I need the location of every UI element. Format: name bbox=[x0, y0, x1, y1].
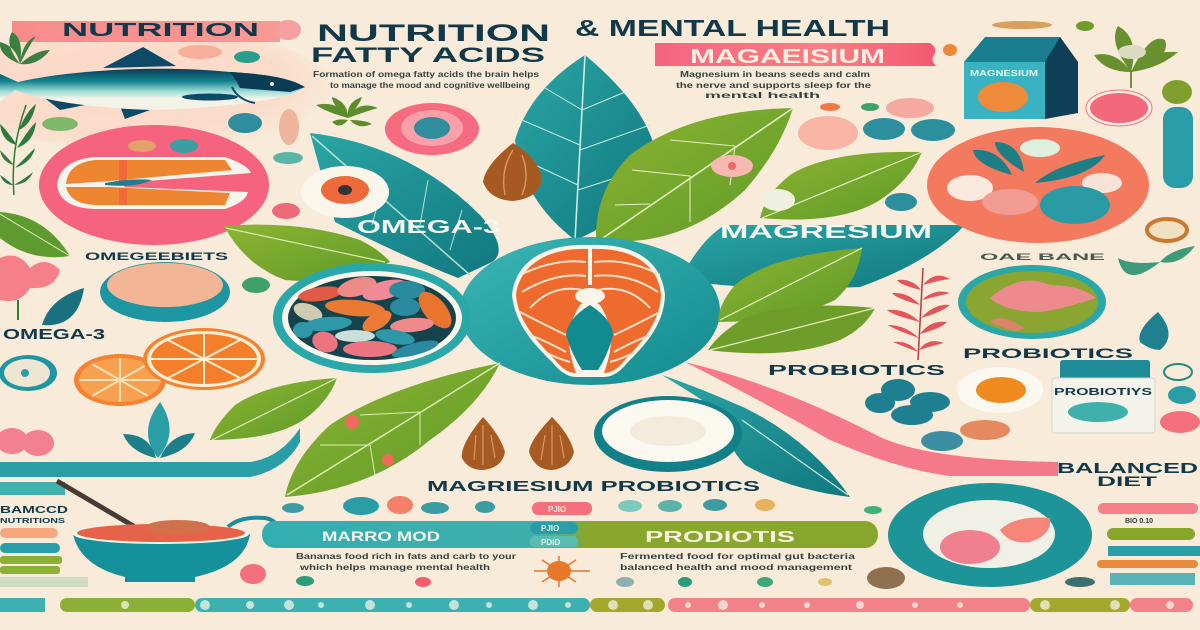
magnesium text block: Magnesium in beans seeds and calm bbox=[680, 70, 870, 79]
title: NUTRITION bbox=[317, 20, 550, 47]
sun icon bbox=[534, 556, 590, 587]
bottom-left labels: BAMCCD bbox=[0, 505, 68, 516]
small bowl left bbox=[0, 355, 57, 391]
flower pink left bbox=[0, 256, 60, 320]
teal centre ellipse bbox=[460, 237, 720, 385]
capsule right bbox=[1163, 107, 1193, 188]
bottom-left labels: NUTRITIONS bbox=[0, 518, 65, 525]
right sprig bbox=[1118, 246, 1195, 275]
bowl of mixed nuts bbox=[273, 263, 471, 373]
milk carton: MAGNESIUM bbox=[970, 69, 1038, 78]
right bottom labels bbox=[1065, 503, 1200, 587]
green leaf lower large bbox=[285, 363, 500, 497]
bottom text left: Bananas food rich in fats and carb to your bbox=[296, 552, 516, 561]
green leaf right upper bbox=[718, 248, 862, 322]
teal balls bbox=[865, 379, 963, 451]
pink pill above banner bbox=[532, 502, 592, 515]
probiotics label far right: PROBIOTICS bbox=[963, 345, 1133, 361]
pink disc top bbox=[385, 103, 479, 155]
scattered dots row below text bbox=[296, 576, 832, 587]
pink flower lower left bbox=[0, 428, 54, 456]
teal leaf top bbox=[515, 55, 655, 240]
left column label: omega-3: OMEGA-3 bbox=[3, 326, 105, 343]
small teal pebble bbox=[885, 193, 917, 211]
teal leaf small left bbox=[42, 288, 84, 325]
top left banner: nutrition: NUTRITION bbox=[62, 20, 259, 40]
balanced diet label: BALANCED bbox=[1057, 460, 1198, 477]
teal leaf left bbox=[310, 133, 499, 278]
right dots bbox=[1160, 364, 1200, 433]
green leaf mid-lower left bbox=[210, 378, 337, 440]
bottom centre banner: PDID bbox=[541, 538, 560, 547]
grapefruit bbox=[1086, 90, 1152, 126]
pink ribbon bbox=[685, 362, 1058, 476]
top left banner: nutrition bbox=[12, 20, 301, 42]
fatty acids text block bbox=[313, 70, 540, 90]
green dot left bbox=[242, 277, 270, 293]
leaf top left of column bbox=[0, 212, 70, 257]
pink tint behind fish bbox=[0, 26, 330, 150]
bottom strip bbox=[0, 598, 1193, 612]
oranges bbox=[74, 328, 265, 406]
title: & MENTAL HEALTH bbox=[575, 15, 890, 41]
teal sprig left bbox=[123, 402, 195, 458]
magnesium text block bbox=[676, 70, 872, 100]
title bbox=[311, 15, 890, 67]
magnesium banner bbox=[655, 43, 936, 68]
fatty acids text block: Formation of omega fatty acids the brain helps bbox=[313, 70, 540, 79]
bottom text left bbox=[296, 552, 516, 572]
probiotics jar bbox=[1052, 360, 1155, 433]
flower bbox=[301, 166, 389, 218]
small ring fruit bbox=[1147, 219, 1187, 241]
top scattered icons right bbox=[820, 21, 1094, 111]
grain bowl bbox=[100, 262, 230, 322]
fish bbox=[0, 47, 305, 119]
bottom text right: Fermented food for optimal gut bacteria bbox=[620, 552, 856, 561]
plant top left bbox=[0, 32, 50, 64]
bottom centre banner: MARRO MOD bbox=[322, 528, 440, 544]
fern red bbox=[887, 268, 950, 360]
top scattered icons left bbox=[42, 45, 303, 164]
title: FATTY ACIDS bbox=[311, 44, 545, 67]
small sprig bbox=[316, 97, 378, 126]
fatty acids text block: to manage the mood and cognitive wellbeing bbox=[330, 81, 530, 90]
green disc right bbox=[1162, 80, 1192, 104]
green leaf right lower bbox=[708, 306, 875, 353]
pink pill above banner: PJIO bbox=[548, 505, 566, 514]
magnesium probiotics label: MAGRIESIUM PROBIOTICS bbox=[427, 478, 760, 495]
coral puff icon bbox=[798, 116, 858, 150]
bottom text left: which helps manage mental health bbox=[299, 563, 490, 572]
green leaf right bbox=[760, 152, 922, 220]
coin bbox=[867, 567, 905, 589]
bottom text right bbox=[620, 552, 856, 572]
teal circle with dome bbox=[888, 483, 1092, 587]
teal pebbles top right bbox=[863, 98, 955, 141]
plant top right bbox=[1094, 26, 1178, 88]
probiotics label right: PROBIOTICS bbox=[768, 362, 945, 379]
green leaf mid left bbox=[224, 225, 390, 281]
fern left bbox=[0, 104, 36, 195]
label above salad bowl: OAE BANE bbox=[980, 252, 1105, 262]
salmon steak bbox=[512, 245, 665, 377]
almond top bbox=[483, 143, 542, 201]
balanced diet label bbox=[1057, 460, 1198, 489]
yogurt bowl bbox=[594, 396, 742, 472]
teal leaf lower right bbox=[662, 375, 850, 497]
magnesium text block: the nerve and supports sleep for the bbox=[676, 81, 872, 90]
omega-3 label centre: OMEGA-3 bbox=[357, 217, 500, 237]
magnesium banner: MAGAEISIUM bbox=[690, 46, 885, 68]
pink dot leaf-side bbox=[272, 203, 300, 219]
pink dot bottom bbox=[240, 564, 266, 584]
balanced diet label: DIET bbox=[1097, 473, 1158, 489]
magnesium text block: mental health bbox=[705, 91, 820, 100]
probiotics jar: PROBIOTIYS bbox=[1054, 387, 1153, 398]
bottom-left labels bbox=[0, 505, 88, 587]
bottom centre banner bbox=[262, 521, 878, 548]
green leaf upper right bbox=[596, 108, 793, 241]
salmon plate bbox=[39, 125, 269, 245]
salad bowl right bbox=[958, 265, 1106, 339]
coral shrimp icon bbox=[960, 420, 1010, 440]
teal magnesium leaf: MAGRESIUM bbox=[720, 222, 932, 242]
left short bar bbox=[0, 482, 65, 495]
coral circle with fruits bbox=[927, 127, 1149, 243]
right teal leaf bbox=[1139, 312, 1169, 350]
almonds pair bbox=[462, 417, 574, 470]
left column label: omega: OMEGEEBIETS bbox=[85, 251, 228, 263]
milk carton bbox=[964, 37, 1078, 119]
right bottom labels: BIO 0.10 bbox=[1125, 518, 1153, 525]
soup bowl bbox=[57, 481, 277, 582]
left teal ribbon bbox=[0, 428, 300, 477]
bottom text right: balanced health and mood management bbox=[620, 563, 852, 572]
scattered dots row above banner bbox=[282, 496, 882, 515]
bottom centre banner: PRODIOTIS bbox=[645, 529, 796, 546]
teal magnesium leaf bbox=[680, 222, 965, 288]
egg plate bbox=[957, 367, 1043, 413]
bottom centre banner: PJIO bbox=[541, 524, 559, 533]
